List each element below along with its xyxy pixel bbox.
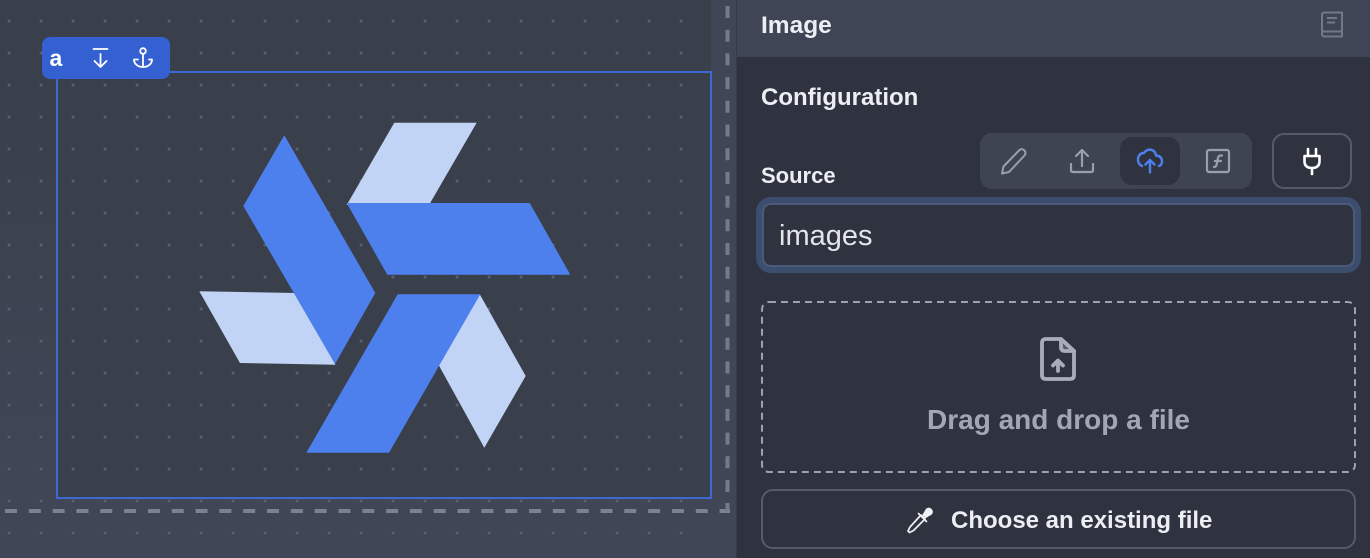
- dashed container outline: [5, 6, 730, 513]
- active tab highlight: [1120, 137, 1180, 185]
- icon: anchor: [133, 47, 153, 68]
- source text input: [762, 203, 1355, 267]
- canvas side strip: [711, 0, 737, 558]
- icon: plug: [1303, 148, 1321, 176]
- icon: function: [1206, 148, 1230, 174]
- connect plug button: [1272, 133, 1352, 189]
- icon: align bottom arrow: [92, 48, 108, 68]
- dropzone dashed outline: [761, 301, 1356, 473]
- icon: cloud upload: [1136, 148, 1164, 174]
- canvas bottom strip: [0, 499, 737, 558]
- button text: Choose an existing file: [951, 507, 1212, 534]
- element toolbar: [42, 37, 170, 79]
- icon: documentation book: [1321, 12, 1343, 38]
- label: Source: Source: [761, 163, 836, 188]
- icon: eyedropper: [907, 508, 933, 534]
- panel: canvas: [0, 0, 737, 558]
- dropzone text: Drag and drop a file: [927, 404, 1190, 435]
- logo: pinwheel: [199, 122, 570, 453]
- selected image frame: [56, 71, 712, 499]
- sidebar header: [737, 0, 1370, 57]
- dot grid: [8, 20, 682, 534]
- panel: image settings sidebar: [737, 0, 1370, 558]
- icon: pencil: [1001, 148, 1026, 174]
- icon: file upload: [1040, 337, 1076, 381]
- file dropzone: [761, 301, 1356, 473]
- heading: Image: Image: [761, 12, 832, 38]
- canvas left strip: [0, 80, 56, 499]
- source mode switch: [980, 133, 1252, 189]
- input value: images: [779, 220, 872, 252]
- icon: upload: [1070, 148, 1094, 174]
- toolbar label: a: [50, 44, 62, 70]
- choose existing file button: [761, 489, 1356, 549]
- heading: Configuration: Configuration: [761, 84, 918, 110]
- canvas divider edge: [736, 0, 737, 558]
